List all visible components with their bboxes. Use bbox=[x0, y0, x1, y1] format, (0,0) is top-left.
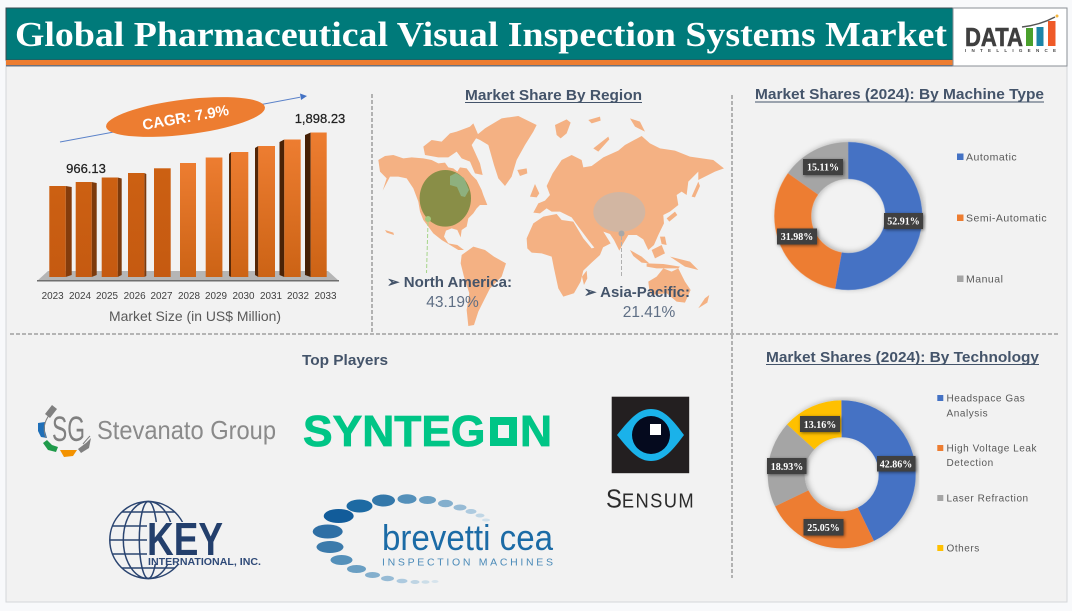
logo: Data Intelligence bbox=[953, 8, 1067, 66]
axis title: Market Size (in US$ Million) bbox=[109, 308, 281, 324]
logo: Stevanato Group: SG bbox=[52, 410, 85, 449]
bars bbox=[49, 132, 327, 277]
North America label bbox=[387, 274, 512, 311]
dividers bbox=[10, 94, 1058, 578]
header banner bbox=[6, 8, 953, 66]
logo: Key International: KEY bbox=[147, 513, 223, 565]
logo: Stevanato Group: Stevanato Group bbox=[97, 415, 276, 445]
heading: Market Shares (2024): By Machine Type bbox=[755, 86, 1044, 103]
data labels: 42.86% bbox=[880, 460, 912, 470]
data label: 2023 value: 966.13 bbox=[66, 161, 106, 176]
Asia-Pacific label: ➢ Asia-Pacific: bbox=[584, 284, 690, 301]
legend: Semi-Automatic bbox=[966, 212, 1047, 224]
title: Global Pharmaceutical Visual Inspection Systems Market bbox=[15, 15, 947, 54]
data labels: 31.98% bbox=[781, 232, 813, 243]
growth arrow bbox=[60, 94, 307, 142]
data labels: 25.05% bbox=[807, 523, 840, 534]
logo: Data Intelligence: DATA bbox=[965, 22, 1023, 52]
year axis labels: 2023 bbox=[42, 291, 64, 302]
year axis labels: 2024 bbox=[69, 291, 91, 302]
logo: Key International: INTERNATIONAL, INC. bbox=[148, 556, 261, 568]
data labels: 18.93% bbox=[771, 462, 803, 473]
data labels: 15.11% bbox=[807, 162, 839, 174]
data label: 2033 value: 1,898.23 bbox=[295, 111, 345, 126]
year axis labels bbox=[42, 291, 337, 302]
year axis labels: 2032 bbox=[287, 291, 309, 302]
data labels: 52.91% bbox=[887, 216, 920, 228]
logo: Syntegon: SYNTEGON bbox=[303, 407, 552, 456]
heading: Market Share By Region bbox=[465, 87, 642, 104]
year axis labels: 2033 bbox=[315, 291, 337, 302]
logo: Data Intelligence: INTELLIGENCE bbox=[965, 48, 1056, 53]
panel: market size bar chart bbox=[37, 90, 345, 324]
logo: Brevetti CEA bbox=[313, 494, 554, 584]
logo: Stevanato Group bbox=[38, 405, 276, 457]
North America highlight bbox=[420, 170, 471, 273]
CAGR callout bbox=[104, 90, 267, 144]
data labels bbox=[777, 159, 923, 244]
logo: Key International bbox=[110, 502, 261, 578]
legend: Others bbox=[946, 544, 980, 554]
Asia-Pacific label bbox=[584, 284, 690, 321]
year axis labels: 2031 bbox=[260, 291, 282, 302]
year axis labels: 2027 bbox=[151, 291, 172, 302]
year axis labels: 2028 bbox=[178, 291, 200, 302]
logo: Brevetti CEA: brevetti cea bbox=[382, 517, 554, 558]
chart floor bbox=[37, 271, 339, 282]
data labels: 13.16% bbox=[804, 420, 836, 431]
legend: Automatic bbox=[966, 152, 1017, 164]
panel: technology donut bbox=[766, 349, 1040, 554]
year axis labels: 2030 bbox=[233, 291, 255, 302]
year axis labels: 2029 bbox=[205, 291, 227, 302]
world map bbox=[378, 116, 724, 326]
legend: Detection bbox=[946, 458, 994, 469]
legend: Laser Refraction bbox=[946, 494, 1029, 504]
Asia-Pacific label: 21.41% bbox=[623, 304, 675, 321]
CAGR callout: CAGR: 7.9% bbox=[141, 102, 230, 134]
North America label: 43.19% bbox=[426, 294, 479, 311]
legend: High Voltage Leak bbox=[946, 444, 1037, 454]
North America label: ➢ North America: bbox=[387, 274, 512, 291]
panel: machine type donut bbox=[755, 86, 1047, 286]
Asia-Pacific highlight bbox=[593, 192, 645, 278]
year axis labels: 2026 bbox=[124, 291, 146, 302]
legend: Manual bbox=[966, 274, 1003, 286]
legend bbox=[937, 394, 1037, 554]
heading: Top Players bbox=[302, 352, 388, 369]
logo: Brevetti CEA: INSPECTION MACHINES bbox=[382, 556, 553, 568]
data labels bbox=[767, 416, 916, 536]
legend: Headspace Gas bbox=[946, 394, 1025, 404]
legend: Analysis bbox=[946, 408, 988, 420]
donut chart bbox=[793, 160, 904, 272]
panel: market share by region bbox=[378, 87, 724, 326]
legend bbox=[957, 152, 1047, 286]
logo: Sensum bbox=[606, 397, 695, 514]
panel: top players bbox=[38, 352, 695, 584]
heading: Market Shares (2024): By Technology bbox=[766, 349, 1040, 366]
year axis labels: 2025 bbox=[96, 291, 118, 302]
logo: Sensum: SENSUM bbox=[606, 484, 695, 514]
donut chart bbox=[786, 419, 897, 530]
